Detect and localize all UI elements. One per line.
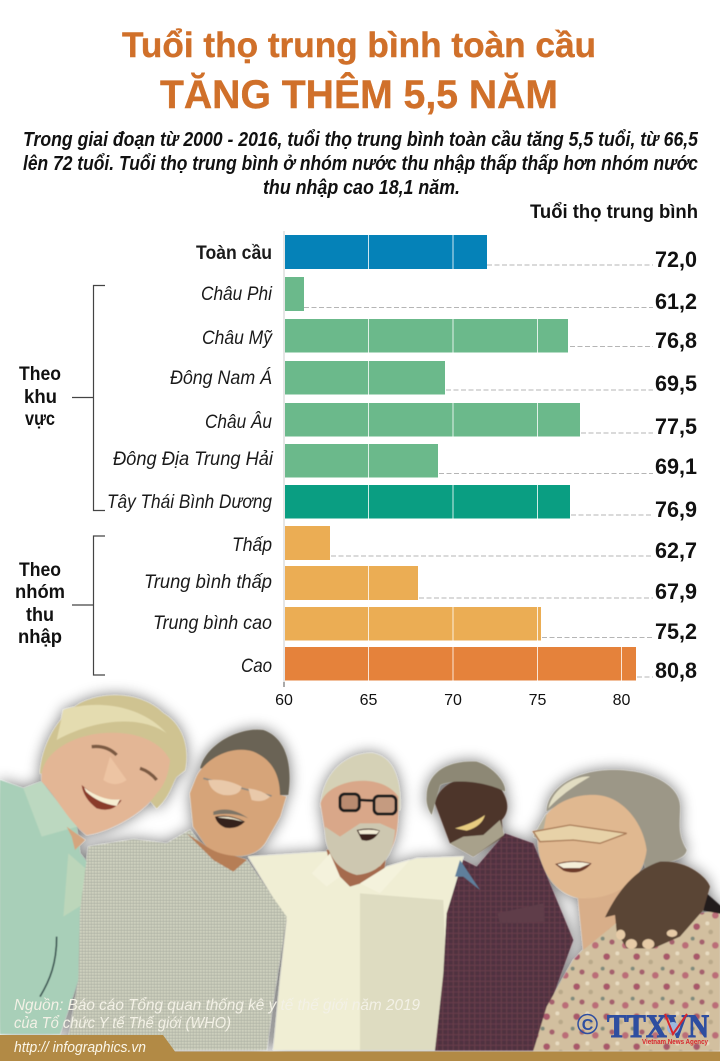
value labels: 67,9 [655, 579, 697, 604]
category labels: Tây Thái Bình Dương [107, 492, 272, 513]
axis labels: 75 [529, 692, 546, 709]
bracket: by region [72, 286, 105, 510]
logo: TTXVN: TTXVN [607, 1009, 709, 1045]
category labels: Châu Mỹ [202, 328, 273, 349]
group label: by region: vực [25, 409, 55, 430]
source note: Nguồn: Báo cáo Tổng quan thống kê y tế thế giới năm 2019 [14, 996, 420, 1014]
value labels: 76,9 [655, 497, 697, 522]
person: man with cap and dark shirt [427, 762, 573, 1051]
axis labels [275, 692, 630, 709]
title [122, 26, 596, 117]
group label: by income [15, 560, 65, 648]
person: woman in floral dress [533, 770, 720, 1051]
source note [14, 996, 420, 1032]
category labels: Đông Địa Trung Hải [113, 449, 274, 470]
value labels: 77,5 [655, 414, 697, 439]
logo: TTXVN: Vietnam News Agency [642, 1039, 708, 1046]
bar chart [275, 231, 653, 709]
axis labels: 70 [444, 692, 462, 709]
value labels: 80,8 [655, 658, 697, 683]
value labels: 61,2 [655, 289, 697, 314]
category labels: Đông Nam Á [170, 368, 272, 389]
category labels: Châu Âu [205, 411, 272, 433]
category labels: Thấp [232, 535, 272, 556]
person: man with beard head [312, 753, 445, 1050]
category labels: Toàn cầu [196, 243, 272, 264]
group label: by income: nhập [18, 627, 62, 648]
intro text: thu nhập cao 18,1 năm. [263, 177, 460, 199]
group label: by region: khu [24, 387, 57, 408]
group label: by region: Theo [19, 364, 61, 385]
category labels: Châu Phi [201, 284, 273, 305]
bars [285, 235, 636, 680]
axis labels: 65 [360, 692, 378, 709]
category labels: Trung bình cao [153, 613, 272, 634]
white gridlines on bars [368, 235, 622, 680]
title: TĂNG THÊM 5,5 NĂM [160, 71, 558, 117]
value labels: 76,8 [655, 328, 697, 353]
value labels: 75,2 [655, 619, 697, 644]
group label: by income: thu [26, 605, 54, 626]
axis labels: 60 [275, 692, 293, 709]
logo: TTXVN: C [582, 1017, 594, 1034]
value labels: 69,1 [655, 454, 697, 479]
value labels [655, 247, 697, 683]
person: woman in teal shirt [0, 695, 186, 1034]
group label: by region [19, 364, 61, 430]
source note: của Tổ chức Y tế Thế giới (WHO) [14, 1014, 231, 1032]
value labels: 69,5 [655, 371, 697, 396]
category labels [107, 243, 274, 677]
group label: by income: Theo [19, 560, 61, 581]
value labels: 72,0 [655, 247, 697, 272]
footer bar [0, 1035, 720, 1061]
category labels: Trung bình thấp [144, 572, 272, 593]
person: man in checked shirt [67, 730, 290, 1050]
person: man in white shirt body [248, 852, 463, 1050]
photo: five smiling older people [0, 695, 720, 1051]
category labels: Cao [241, 656, 272, 677]
bracket: by income [72, 536, 105, 675]
group label: by income: nhóm [15, 582, 65, 603]
value labels: 62,7 [655, 538, 697, 563]
dashed leader lines [304, 265, 653, 677]
intro text [23, 129, 699, 199]
axis labels: 80 [613, 692, 630, 709]
footer url: http:// infographics.vn [14, 1039, 146, 1056]
column heading: Tuổi thọ trung bình [530, 202, 698, 223]
title: Tuổi thọ trung bình toàn cầu [122, 26, 596, 65]
